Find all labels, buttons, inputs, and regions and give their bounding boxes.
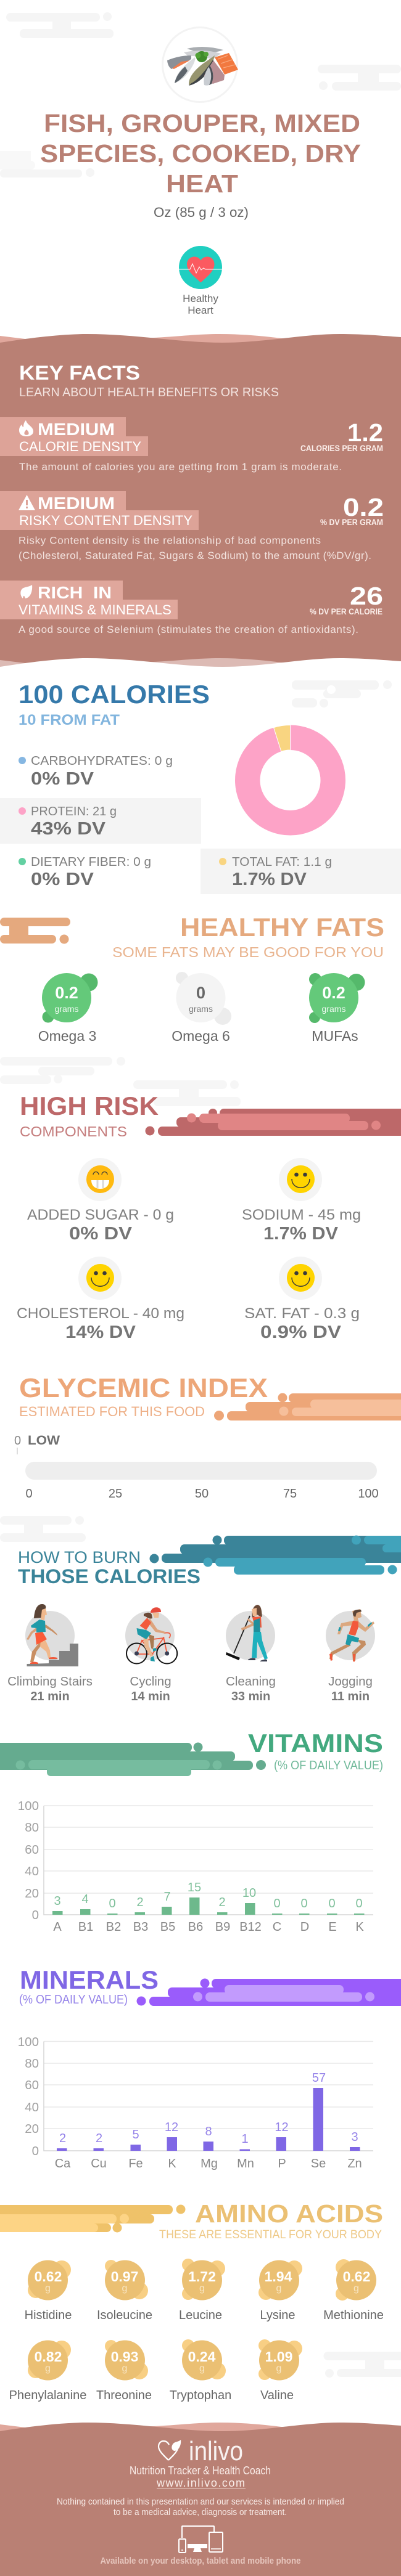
legend: protein: 43% DV: [31, 819, 106, 839]
bar chart: minerals: 12: [165, 2121, 178, 2134]
sodium: 1.7% DV: [263, 1224, 339, 1244]
heading: GLYCEMIC INDEX: [19, 1373, 268, 1403]
heading: (% OF DAILY VALUE): [274, 1759, 383, 1772]
omega 3: 0.2: [55, 984, 78, 1002]
panel: high risk components: [0, 1057, 401, 1342]
bar chart: vitamins: 80: [25, 1820, 39, 1835]
legend: protein: [0, 798, 201, 844]
amino: lysine: 1.94: [265, 2268, 292, 2285]
decorative ribbon: [0, 2205, 185, 2232]
bar chart: vitamins: B3: [133, 1920, 148, 1934]
activity: cleaning: [226, 1605, 275, 1661]
disclaimer: to be a medical advice, diagnosis or treatment.: [114, 2507, 287, 2517]
heading: HOW TO BURN: [18, 1548, 141, 1567]
decorative ribbon: [214, 1393, 401, 1420]
calorie density fact: [0, 417, 383, 473]
bar chart: vitamins: A: [53, 1920, 62, 1934]
tagline: Nutrition Tracker & Health Coach: [130, 2464, 271, 2477]
amino: phenylalanine: Phenylalanine: [9, 2389, 86, 2402]
gauge bar: [25, 1462, 377, 1480]
heading: 100 CALORIES: [19, 680, 210, 709]
risky content density fact: 0.2: [343, 493, 384, 521]
added sugar: ADDED SUGAR - 0 g: [27, 1207, 174, 1223]
heading: THOSE CALORIES: [18, 1565, 200, 1588]
icon: healthy heart: [179, 246, 222, 289]
amino: threonine: g: [122, 2363, 127, 2374]
activity durations: 21 min: [30, 1690, 70, 1703]
omega 6: 0: [196, 984, 205, 1002]
legend: total fat: [200, 849, 401, 894]
heading: [20, 1091, 159, 1139]
heading: [19, 680, 210, 728]
panel: amino acids: [0, 2199, 401, 2402]
activity: cycling: [125, 1607, 177, 1664]
activity durations: 14 min: [131, 1690, 170, 1703]
activity labels: [7, 1674, 373, 1689]
bar chart: minerals: P: [278, 2157, 286, 2170]
bar chart: vitamins: [18, 1799, 373, 1934]
heading: THESE ARE ESSENTIAL FOR YOUR BODY: [159, 2228, 382, 2241]
mufas: [309, 973, 365, 1044]
activity durations: [30, 1690, 370, 1703]
mufas: grams: [322, 1004, 345, 1014]
amino: methionine: g: [353, 2283, 359, 2294]
risky content density fact: RISKY CONTENT DENSITY: [19, 513, 192, 528]
mufas: 0.2: [322, 984, 345, 1002]
bar chart: minerals: Zn: [347, 2157, 362, 2170]
bar chart: vitamins: 2: [136, 1896, 144, 1909]
amino: isoleucine: [97, 2260, 152, 2322]
legend: protein: PROTEIN: 21 g: [31, 804, 117, 818]
added sugar: 0% DV: [69, 1224, 133, 1244]
panel: glycemic index: [14, 1373, 401, 1501]
heading: COMPONENTS: [20, 1123, 127, 1139]
title: SPECIES, COOKED, DRY: [40, 139, 361, 168]
bar chart: minerals: Mg: [200, 2157, 218, 2170]
bar chart: minerals: 80: [25, 2056, 39, 2071]
bar chart: vitamins: 4: [81, 1893, 89, 1906]
bar chart: minerals: 0: [32, 2144, 39, 2158]
icon: warning triangle: [19, 495, 35, 510]
gauge axis: 0: [25, 1487, 33, 1501]
heading: [19, 1965, 159, 2007]
bar chart: vitamins: 10: [242, 1886, 256, 1900]
bar chart: vitamins: 0: [32, 1908, 39, 1922]
bar chart: vitamins: 100: [18, 1799, 39, 1813]
legend: dietary fiber: 0% DV: [31, 870, 94, 889]
bar chart: minerals: Fe: [128, 2157, 143, 2170]
bar chart: vitamins: 40: [25, 1864, 39, 1878]
bar chart: minerals: 57: [312, 2071, 326, 2085]
bar chart: minerals: 2: [96, 2132, 102, 2145]
activity labels: Jogging: [328, 1674, 373, 1689]
cholesterol: [17, 1257, 184, 1342]
mufas: MUFAs: [312, 1028, 358, 1044]
bar chart: vitamins: 0: [273, 1897, 281, 1910]
saturated fat: 0.9% DV: [260, 1323, 342, 1342]
amino: leucine: g: [199, 2283, 205, 2294]
bar chart: minerals: 3: [351, 2130, 358, 2144]
amino: isoleucine: g: [122, 2283, 127, 2294]
bar chart: vitamins: E: [328, 1920, 337, 1934]
activity labels: Cleaning: [226, 1674, 276, 1689]
saturated fat: [244, 1257, 360, 1342]
sodium: SODIUM - 45 mg: [242, 1207, 361, 1223]
rich in vitamins fact: RICH IN: [38, 583, 112, 602]
gauge marker: [14, 1433, 60, 1454]
rich in vitamins fact: VITAMINS & MINERALS: [19, 602, 172, 618]
amino: lysine: Lysine: [260, 2309, 296, 2322]
panel: minerals: [18, 1965, 401, 2170]
heading: (% OF DAILY VALUE): [19, 1993, 128, 2007]
bar chart: minerals: [18, 2035, 373, 2170]
bar chart: vitamins: 0: [355, 1897, 363, 1910]
legend: carbohydrates: 0% DV: [31, 769, 94, 789]
bar chart: vitamins: 0: [328, 1897, 336, 1910]
gauge axis: 75: [283, 1487, 297, 1501]
bar chart: vitamins: B1: [78, 1920, 93, 1934]
bar chart: vitamins: B2: [106, 1920, 121, 1934]
gauge axis: [25, 1487, 379, 1501]
healthy heart label: Heart: [188, 304, 213, 316]
bar chart: vitamins: 3: [54, 1894, 61, 1908]
food image circle: [163, 27, 238, 102]
legend: dietary fiber: DIETARY FIBER: 0 g: [31, 855, 151, 869]
heading: [159, 2199, 383, 2241]
amino: threonine: 0.93: [111, 2349, 138, 2365]
bar chart: vitamins: B9: [215, 1920, 230, 1934]
amino: valine: [258, 2339, 302, 2402]
amino: histidine: [25, 2260, 72, 2322]
amino: valine: 1.09: [265, 2349, 292, 2365]
gauge marker: LOW: [28, 1433, 60, 1448]
amino: threonine: Threonine: [96, 2389, 152, 2402]
bar chart: minerals: 2: [59, 2132, 66, 2145]
rich in vitamins fact: [0, 581, 383, 635]
saturated fat: SAT. FAT - 0.3 g: [244, 1305, 360, 1322]
bar chart: vitamins: B12: [239, 1920, 262, 1934]
serving size: Oz (85 g / 3 oz): [154, 205, 249, 220]
bar chart: minerals: 12: [275, 2121, 289, 2134]
panel: vitamins: [0, 1729, 383, 1934]
amino: tryptophan: Tryptophan: [170, 2389, 231, 2402]
calorie density fact: MEDIUM: [38, 420, 115, 439]
risky content density fact: [0, 491, 384, 561]
activity durations: 11 min: [331, 1690, 370, 1703]
icon: heart with leaf: [159, 2441, 178, 2460]
bar chart: minerals: 1: [241, 2132, 249, 2146]
activity: jogging: [326, 1609, 375, 1662]
amino: lysine: [258, 2260, 302, 2322]
header panel: [0, 12, 401, 316]
cholesterol: CHOLESTEROL - 40 mg: [17, 1305, 184, 1322]
bar chart: minerals: 5: [132, 2128, 139, 2142]
amino: tryptophan: 0.24: [188, 2349, 216, 2365]
heading: [19, 1373, 268, 1419]
title: [40, 109, 361, 198]
icon: smiling face: [287, 1264, 315, 1292]
donut chart: [247, 725, 333, 823]
cholesterol: 14% DV: [65, 1323, 136, 1342]
gauge marker: 0: [14, 1434, 21, 1448]
bar chart: vitamins: 60: [25, 1843, 39, 1857]
bar chart: minerals: 60: [25, 2078, 39, 2092]
amino: leucine: [179, 2259, 225, 2322]
heading: KEY FACTS: [19, 362, 140, 384]
bar chart: vitamins: 20: [25, 1886, 39, 1901]
activity: climbing stairs: [25, 1604, 78, 1666]
heading: SOME FATS MAY BE GOOD FOR YOU: [112, 944, 384, 960]
amino: tryptophan: g: [199, 2363, 205, 2374]
amino: histidine: g: [45, 2283, 51, 2294]
calorie density fact: CALORIES PER GRAM: [300, 443, 383, 453]
icon: grinning face: [86, 1165, 114, 1193]
activity durations: 33 min: [231, 1690, 270, 1703]
amino: lysine: g: [276, 2283, 281, 2294]
legend: total fat: TOTAL FAT: 1.1 g: [232, 855, 332, 869]
legend: carbohydrates: CARBOHYDRATES: 0 g: [31, 754, 173, 768]
icon: smiling face: [287, 1165, 315, 1193]
calorie density fact: CALORIE DENSITY: [19, 439, 141, 454]
amino: isoleucine: Isoleucine: [97, 2309, 152, 2322]
bar chart: vitamins: 0: [300, 1897, 308, 1910]
bar chart: minerals: 20: [25, 2122, 39, 2136]
amino: isoleucine: 0.97: [111, 2268, 138, 2285]
bar chart: minerals: Se: [311, 2157, 326, 2170]
amino: methionine: [323, 2259, 384, 2322]
risky content density fact: MEDIUM: [38, 494, 115, 513]
bar chart: vitamins: 7: [163, 1890, 171, 1904]
decorative ribbon: [149, 1536, 401, 1575]
bar chart: minerals: 40: [25, 2100, 39, 2114]
heading: [112, 913, 384, 960]
amino: methionine: 0.62: [343, 2268, 370, 2285]
amino: histidine: Histidine: [25, 2309, 72, 2322]
disclaimer: Nothing contained in this presentation and our services is intended or implied: [57, 2497, 344, 2507]
bar chart: vitamins: 15: [188, 1881, 201, 1894]
heading: [248, 1729, 383, 1772]
bar chart: vitamins: 2: [218, 1896, 226, 1909]
activity labels: Cycling: [130, 1674, 172, 1689]
heading: HIGH RISK: [20, 1091, 159, 1120]
omega 6: grams: [189, 1004, 213, 1014]
healthy heart label: [183, 293, 218, 316]
icon: devices: [179, 2526, 223, 2553]
title: HEAT: [166, 169, 238, 198]
amino: phenylalanine: g: [45, 2363, 51, 2374]
omega 6: [172, 972, 231, 1044]
sodium: [242, 1158, 361, 1244]
heading: AMINO ACIDS: [195, 2199, 383, 2228]
amino: tryptophan: [170, 2339, 231, 2402]
omega 6: Omega 6: [172, 1028, 230, 1044]
amino: valine: g: [276, 2363, 281, 2374]
panel: how to burn those calories: [0, 1516, 401, 1703]
heading: LEARN ABOUT HEALTH BENEFITS OR RISKS: [19, 385, 279, 399]
bar chart: minerals: Mn: [237, 2157, 254, 2170]
bar chart: vitamins: B5: [160, 1920, 175, 1934]
amino: threonine: [96, 2340, 152, 2402]
rich in vitamins fact: A good source of Selenium (stimulates the creation of antioxidants).: [19, 624, 358, 635]
heading: HEALTHY FATS: [180, 913, 384, 942]
panel: footer: [0, 2423, 401, 2576]
amino: phenylalanine: [9, 2341, 86, 2402]
bar chart: minerals: Ca: [55, 2157, 71, 2170]
bar chart: vitamins: C: [273, 1920, 281, 1934]
bar chart: minerals: 8: [205, 2125, 212, 2138]
omega 3: grams: [55, 1004, 78, 1014]
bar chart: minerals: 100: [18, 2035, 39, 2049]
heading: 10 FROM FAT: [19, 712, 120, 728]
disclaimer: [57, 2497, 344, 2517]
decorative ribbon: [146, 1109, 401, 1136]
amino: valine: Valine: [260, 2389, 294, 2402]
activity labels: Climbing Stairs: [7, 1674, 93, 1689]
omega 3: Omega 3: [38, 1028, 96, 1044]
heading: [19, 362, 279, 399]
risky content density fact: % DV PER GRAM: [320, 517, 383, 527]
rich in vitamins fact: 26: [350, 582, 383, 610]
bar chart: vitamins: 0: [109, 1897, 116, 1910]
panel: key facts: [0, 334, 401, 675]
heading: VITAMINS: [248, 1729, 383, 1758]
bar chart: vitamins: D: [300, 1920, 309, 1934]
website: www.inlivo.com: [156, 2477, 245, 2489]
title: FISH, GROUPER, MIXED: [44, 109, 360, 137]
icon: fish assortment: [167, 47, 238, 86]
logo: inlivo: [189, 2436, 243, 2466]
bar chart: minerals: K: [168, 2157, 176, 2170]
amino: phenylalanine: 0.82: [35, 2349, 62, 2365]
calorie density fact: The amount of calories you are getting from 1 gram is moderate.: [19, 461, 342, 473]
icon: flame: [19, 420, 33, 436]
amino: leucine: 1.72: [188, 2268, 216, 2285]
decorative ribbon: [137, 1978, 401, 2006]
heading: MINERALS: [20, 1965, 159, 1994]
availability note: Available on your desktop, tablet and mobile phone: [100, 2556, 301, 2566]
healthy heart label: Healthy: [183, 293, 218, 304]
panel: healthy fats: [0, 913, 384, 1044]
icon: leaf: [20, 585, 32, 598]
legend: dietary fiber: [19, 855, 151, 889]
gauge axis: 25: [109, 1487, 122, 1501]
gauge axis: 50: [195, 1487, 209, 1501]
bar chart: minerals: Cu: [91, 2157, 107, 2170]
risky content density fact: Risky Content density is the relationship of bad components: [19, 535, 321, 546]
bar chart: vitamins: K: [355, 1920, 364, 1934]
heading: ESTIMATED FOR THIS FOOD: [19, 1404, 205, 1419]
amino: methionine: Methionine: [323, 2309, 384, 2322]
decorative ribbon: [0, 1743, 266, 1776]
omega 3: [38, 973, 97, 1044]
added sugar: [27, 1158, 174, 1244]
icon: smiling face: [86, 1264, 114, 1292]
gauge axis: 100: [358, 1487, 379, 1501]
amino: histidine: 0.62: [35, 2268, 62, 2285]
bar chart: vitamins: B6: [188, 1920, 203, 1934]
rich in vitamins fact: % DV PER CALORIE: [310, 606, 382, 616]
logo: [159, 2436, 243, 2466]
calorie density fact: 1.2: [347, 418, 383, 447]
panel: 100 calories: [0, 680, 401, 894]
amino: leucine: Leucine: [179, 2309, 222, 2322]
legend: total fat: 1.7% DV: [232, 870, 307, 889]
legend: carbohydrates: [19, 754, 173, 789]
heading: [18, 1548, 200, 1588]
risky content density fact: (Cholesterol, Saturated Fat, Sugars & Sodium) to the amount (%DV/gr).: [19, 550, 371, 561]
